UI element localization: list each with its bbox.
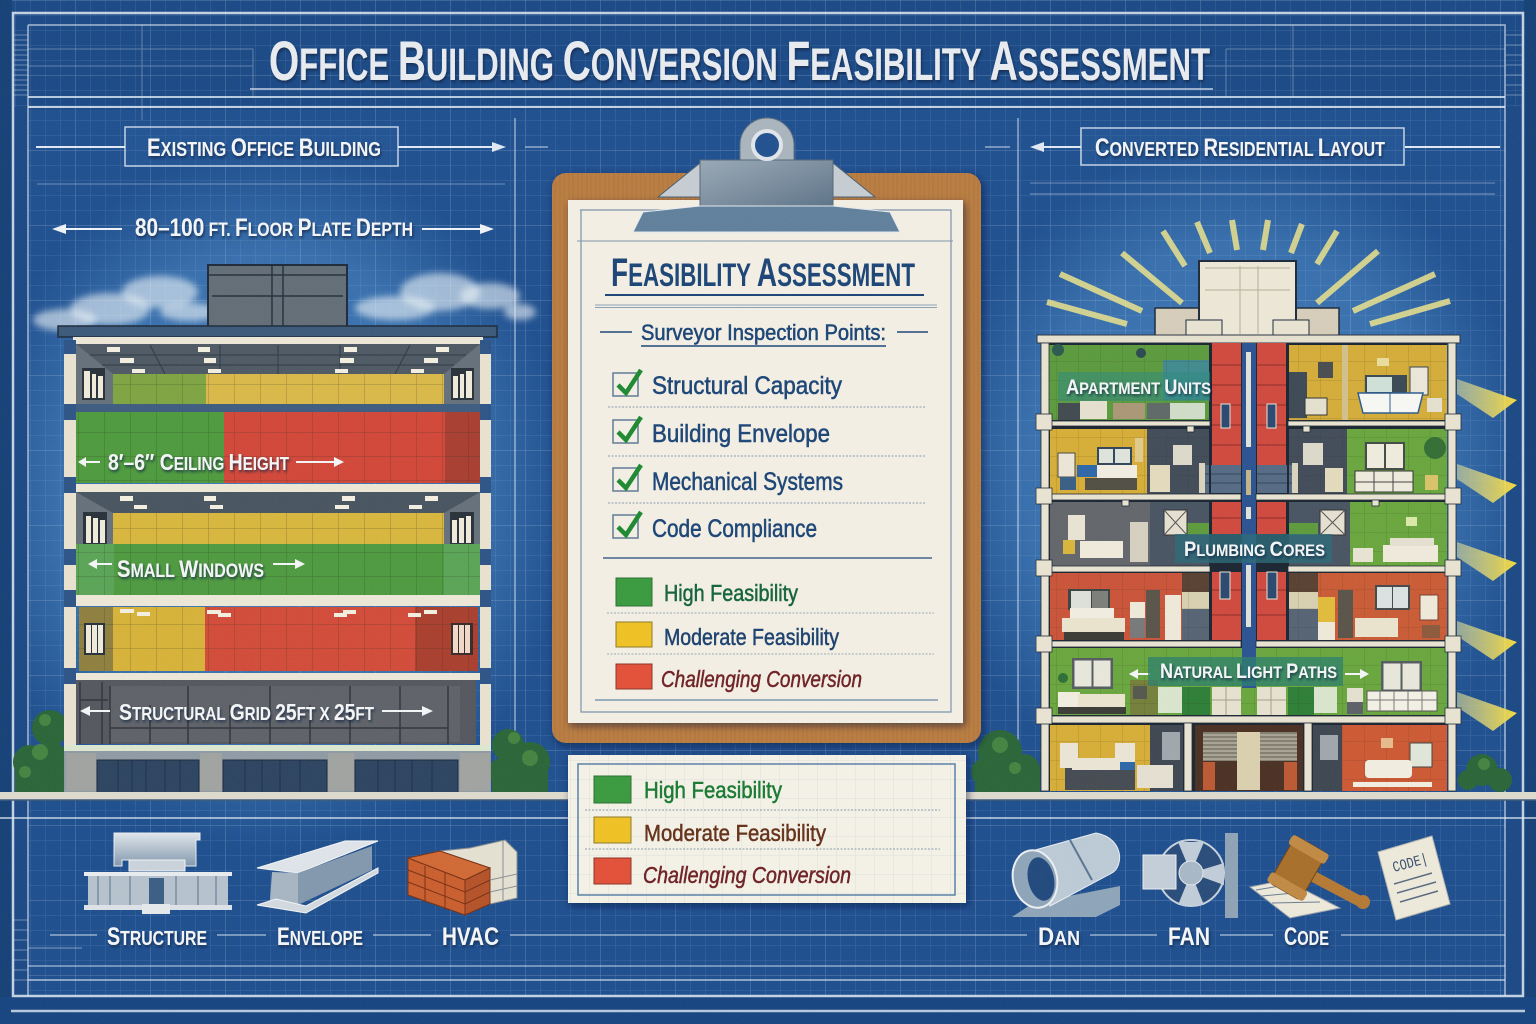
lower legend card: Challenging Conversion [643,862,851,888]
floor 4 [79,607,478,671]
label: ceiling height: 8′–6″ CEILING HEIGHT [108,449,289,475]
backing [1049,343,1447,791]
slab [76,484,480,492]
bottom labels: left: HVAC [442,923,499,951]
item: structural capacity: Structural Capacity [652,372,842,400]
slabs and columns [1036,343,1461,791]
dimension: floor plate depth [52,214,494,242]
section label: existing office building: EXISTING OFFICE BUILDING [147,134,381,162]
row 2 [1050,429,1447,494]
slab [76,673,480,680]
icon: bricks and insulation [408,840,517,915]
penthouse [208,265,347,327]
legend on clipboard [595,578,938,700]
row 6 [1050,725,1447,791]
row 3 [1050,502,1447,566]
icon: code document [1378,836,1450,920]
floor 2 [76,412,480,483]
bottom labels: left [50,923,1505,951]
icon: duct pipe [1007,833,1120,917]
label: small windows: SMALL WINDOWS [117,556,264,583]
label: natural light paths: NATURAL LIGHT PATHS [1160,660,1337,683]
existing office building [58,265,497,793]
item: building envelope: Building Envelope [652,420,830,448]
bottom labels: left: STRUCTURE [107,923,207,951]
lower legend card: Moderate Feasibility [644,820,826,846]
metal clip [633,118,900,232]
label: structural grid: STRUCTURAL GRID 25FT X 25FT [119,699,374,725]
roof slab [1037,335,1460,343]
lower legend card [568,755,966,903]
floor 1 [76,344,480,404]
item: code compliance: Code Compliance [652,515,817,543]
icon: steel beam [257,841,378,913]
title: OFFICE BUILDING CONVERSION FEASIBILITY ASSESSMENT [269,29,1210,92]
icon: gavel on papers [1250,834,1370,918]
item: code compliance [613,512,817,543]
section label: converted residential layout [1030,128,1500,165]
clipboard [552,118,981,743]
icon: code document: CODE| [1391,851,1430,877]
row 5 [1050,648,1447,715]
item: mechanical systems: Mechanical Systems [652,468,843,496]
roof [58,326,497,344]
lower legend card: High Feasibility [644,777,782,803]
bottom labels: right [1038,923,1329,951]
columns [64,340,491,751]
checklist [608,370,925,543]
legend on clipboard: Moderate Feasibility [664,624,839,650]
icon: fan [1143,833,1238,918]
item: mechanical systems [613,465,843,496]
floor 3 [76,492,480,595]
label: apartment units: APARTMENT UNITS [1066,376,1211,399]
light rays [1047,220,1517,731]
dimension: floor plate depth: 80–100 FT. FLOOR PLATE DEPTH [135,214,413,242]
paper [568,200,963,723]
converted residential building [1036,261,1461,791]
slab [76,404,480,412]
legend on clipboard: Challenging Conversion [661,666,862,692]
bottom labels: right: CODE [1284,923,1329,951]
subheading: Surveyor Inspection Points: [641,320,886,345]
icon: structure [84,833,232,914]
clouds [33,273,536,331]
plinth [64,745,491,793]
bottom labels: right: FAN [1168,923,1210,951]
rooftop structure [1155,261,1339,336]
row 4 [1050,573,1447,640]
item: building envelope [613,417,830,448]
floor 5: ground storey [76,680,476,744]
central plumbing core [1199,343,1298,715]
label: natural light paths [1129,657,1369,686]
section label: existing office building [36,127,506,166]
trees [13,710,1512,792]
bottom labels: right: DAN [1038,923,1080,951]
bottom labels: left: ENVELOPE [277,923,363,951]
clipboard heading: FEASIBILITY ASSESSMENT [611,251,915,295]
slab [76,595,480,606]
section label: converted residential layout: CONVERTED RESIDENTIAL LAYOUT [1095,134,1385,162]
label: plumbing cores: PLUMBING CORES [1184,538,1325,561]
ground line [0,792,1536,800]
legend on clipboard: High Feasibility [664,580,798,606]
board [552,173,981,743]
row 1 [1049,344,1447,420]
